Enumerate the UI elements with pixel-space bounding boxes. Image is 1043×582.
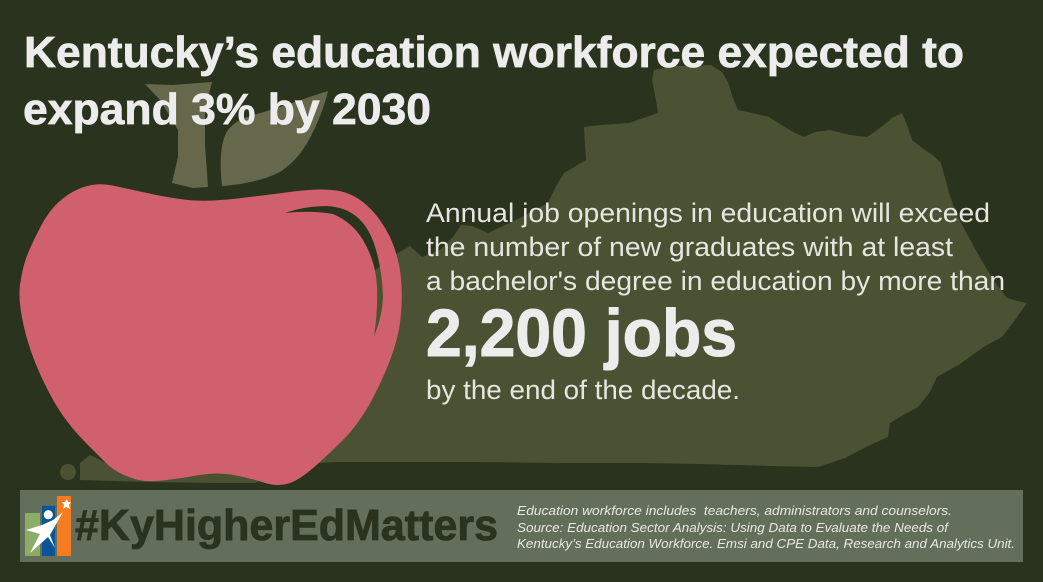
text block: source note: Education workforce includes teachers, administrators and counselors.	[517, 503, 952, 518]
icon: apple stem	[145, 82, 212, 188]
title: expand 3% by 2030	[23, 85, 431, 134]
icon: logo	[25, 496, 71, 556]
text block: job openings: a bachelor's degree in education by more than	[426, 266, 1005, 296]
big number: 2,200 jobs: 2,200 jobs	[426, 296, 737, 371]
title	[23, 28, 964, 134]
text block: source note: Source: Education Sector Analysis: Using Data to Evaluate the Needs of	[517, 520, 949, 535]
icon: apple body	[19, 184, 402, 485]
text block: source note	[517, 503, 1015, 551]
hashtag: #KyHigherEdMatters	[75, 501, 498, 550]
text block: job openings	[426, 198, 1005, 296]
text block: end of decade: by the end of the decade.	[426, 375, 740, 405]
icon: apple leaf	[221, 91, 328, 186]
title: Kentucky’s education workforce expected to	[24, 28, 964, 77]
text block: source note: Kentucky’s Education Workforce. Emsi and CPE Data, Research and Analytics Unit.	[517, 536, 1015, 551]
map: Kentucky silhouette	[60, 65, 1027, 483]
text block: job openings: Annual job openings in education will exceed	[426, 198, 990, 228]
panel: footer band	[20, 490, 1023, 562]
text block: job openings: the number of new graduates with at least	[426, 232, 954, 262]
